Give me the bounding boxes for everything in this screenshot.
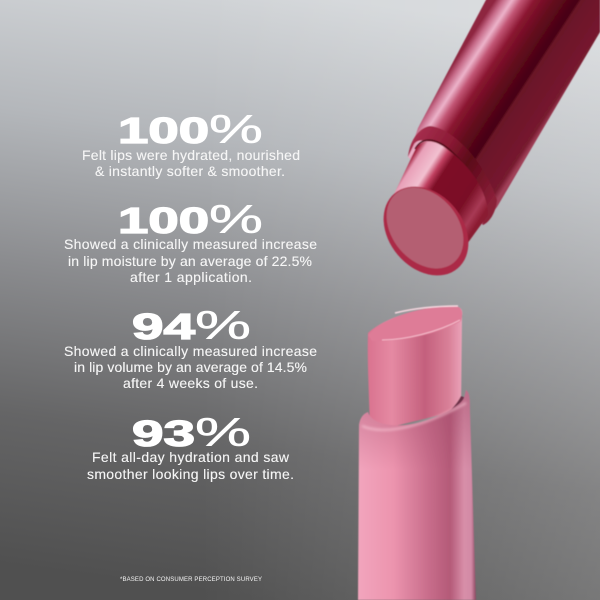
stat 1 text: & instantly softer & smoother.	[95, 163, 285, 179]
stat 2 text: after 1 application.	[130, 269, 252, 285]
tube rim highlight	[362, 403, 466, 430]
stat 3 text	[64, 343, 317, 391]
tube rim shade	[358, 390, 472, 470]
stat 3 text: after 4 weeks of use.	[123, 375, 258, 391]
stat 4 text: Felt all-day hydration and saw	[92, 449, 290, 465]
lip bullet	[385, 141, 488, 272]
stat 2 number: 100 %	[118, 198, 263, 242]
dark red tube body	[408, 0, 600, 225]
dark gap behind tube rim	[440, 396, 466, 420]
tube collar	[408, 126, 497, 225]
stat 4 number: 93 %	[132, 411, 251, 455]
footnote: *BASED ON CONSUMER PERCEPTION SURVEY	[120, 577, 262, 583]
stat 2	[64, 198, 317, 285]
pink lipstick	[358, 306, 476, 600]
stat 2 text	[64, 236, 317, 285]
bullet cut face rim	[366, 170, 486, 292]
stat 3 text: Showed a clinically measured increase	[64, 343, 317, 359]
stat 1 text	[82, 147, 300, 179]
stat 2 text: in lip moisture by an average of 22.5%	[68, 253, 312, 269]
dark red lipstick	[366, 0, 600, 292]
stat 4 text	[87, 449, 294, 482]
stat 1 text: Felt lips were hydrated, nourished	[82, 147, 300, 163]
stat 2 text: Showed a clinically measured increase	[64, 236, 317, 252]
stat 3	[64, 304, 317, 391]
stat 3 number: 94 %	[132, 304, 251, 348]
stat 1	[82, 108, 300, 179]
pink tube	[358, 390, 476, 600]
pink bullet	[368, 306, 462, 432]
stat 4	[87, 411, 294, 482]
bullet cut face	[371, 172, 479, 284]
stat 3 text: in lip volume by an average of 14.5%	[74, 359, 307, 375]
stat 1 number: 100 %	[118, 108, 263, 152]
pink bullet slanted top	[368, 306, 462, 341]
stat 4 text: smoother looking lips over time.	[87, 466, 294, 482]
